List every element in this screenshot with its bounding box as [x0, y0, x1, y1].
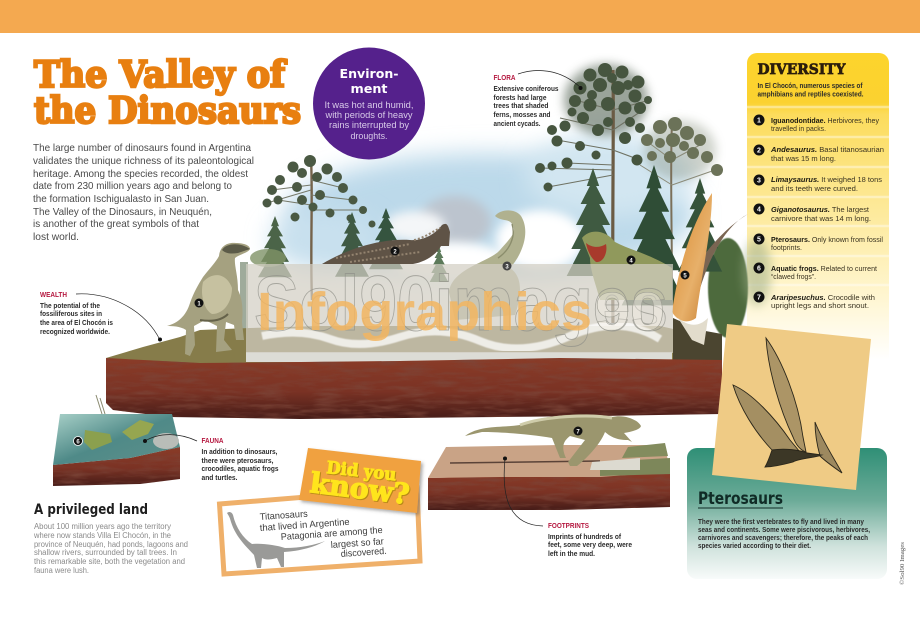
number markers on the scene: 3 — [505, 264, 509, 270]
item 2: that was 15 m long. — [771, 154, 836, 163]
intro text: The large number of dinosaurs found in Argentina — [33, 142, 251, 154]
item 1: travelled in packs. — [771, 124, 826, 133]
callout: flora: FLORA — [494, 75, 516, 82]
intro text: is another of the great symbols of that — [33, 218, 199, 230]
diversity heading: amphibians and reptiles coexisted. — [758, 92, 864, 98]
tree: conifers centre right — [567, 165, 686, 305]
translucent watermark plate: Sol90images — [254, 259, 668, 347]
title: The Valley of — [34, 54, 287, 96]
callout: fauna: In addition to dinosaurs, — [202, 449, 278, 456]
callout: fauna: there were pterosaurs, — [202, 458, 274, 465]
item 3: and its teeth were curved. — [771, 184, 858, 193]
ground: pale strip and dark roots — [246, 318, 722, 363]
item 4: Giganotosaurus. The largest — [771, 205, 870, 214]
callout: footprints: feet, some very deep, were — [548, 542, 632, 549]
title: the Dinosaurs — [34, 90, 301, 132]
soil block main — [106, 358, 722, 419]
box: titanosaur fact — [220, 488, 420, 574]
panel: pterosaurs — [687, 324, 887, 579]
item 4: carnivore that was 14 m long. — [771, 214, 871, 223]
item 1 — [754, 114, 879, 133]
item 6: “clawed frogs”. — [771, 272, 816, 281]
illustration: footprint block with crocodile — [428, 414, 670, 510]
item 7: 7 — [757, 294, 761, 302]
section: a privileged land: fauna were lush. — [34, 566, 89, 575]
sky and clouds — [270, 133, 695, 282]
box: titanosaur fact: Patagonia are among the — [280, 525, 383, 543]
item 3: 3 — [757, 178, 761, 184]
callout: footprints — [503, 456, 632, 558]
intro text — [33, 142, 254, 243]
illustration: pond block with frogs: 6 — [76, 440, 80, 446]
crocodile — [465, 414, 641, 466]
callout: flora: trees that shaded — [494, 103, 548, 110]
item 2 — [754, 144, 884, 163]
intro text: date from 230 million years ago and belong to — [33, 180, 232, 192]
image credit: ©Sol90 Images — [899, 541, 906, 585]
number markers on the scene: 2 — [393, 250, 397, 256]
illustration: footprint block with crocodile: 7 — [576, 430, 580, 436]
badge: did you know: Did you — [326, 459, 398, 486]
callout: wealth — [40, 292, 162, 342]
top orange band — [0, 0, 920, 33]
item 5: Pterosaurs. Only known from fossil — [771, 235, 883, 244]
intro text: The Valley of the Dinosaurs, in Neuquén, — [33, 206, 212, 218]
dinosaur: iguanodon — [167, 243, 250, 356]
callout: flora: Extensive coniferous — [494, 86, 559, 93]
callout: flora: forests had large — [494, 95, 547, 102]
intro text: heritage. Among the species recorded, the oldest — [33, 168, 248, 180]
dinosaur: giganotosaurus — [582, 232, 672, 300]
callout: flora — [494, 71, 582, 128]
panel: pterosaurs: species varied according to their diet. — [698, 543, 811, 550]
callout: flora: ancient cycads. — [494, 121, 541, 128]
item 6: 6 — [757, 266, 761, 272]
box: titanosaur fact: that lived in Argentine — [259, 517, 350, 534]
callout: environment: with periods of heavy — [324, 110, 413, 120]
callout: footprints: left in the mud. — [548, 551, 595, 558]
panel: pterosaurs: carnivores and scavengers; therefore, the peaks of each — [698, 535, 868, 542]
translucent watermark plate: 90 — [595, 282, 665, 342]
box: titanosaur fact: Titanosaurs — [259, 509, 308, 523]
box: titanosaur fact: largest so far — [330, 536, 384, 551]
section: a privileged land: this remarkable site, both the vegetation and — [34, 557, 185, 566]
badge: did you know: know? — [308, 466, 411, 511]
panel: pterosaurs: Pterosaurs — [698, 489, 783, 509]
tree: right background foliage — [678, 178, 771, 338]
callout: flora: ferns, mosses and — [494, 112, 550, 119]
item 7 — [754, 292, 875, 310]
callout: environment: Environ- — [340, 66, 398, 81]
icon: titanosaur sketch — [227, 512, 325, 568]
callout: wealth: the area of El Chocón is — [40, 320, 113, 327]
badge: did you know: know? — [309, 467, 412, 512]
section: a privileged land: About 100 million years ago the territory — [34, 522, 171, 531]
callout: environment: rains interrupted by — [329, 120, 410, 130]
callout: environment: droughts. — [350, 131, 388, 141]
icon: pterosaur drawing — [733, 338, 842, 473]
panel: pterosaurs: seas and continents. Some were piscivorous, herbivores, — [698, 527, 870, 534]
item 4 — [754, 204, 871, 223]
callout: fauna: FAUNA — [202, 438, 224, 445]
callout: environment: It was hot and humid, — [324, 100, 414, 110]
intro text: lost world. — [33, 231, 79, 243]
title — [34, 54, 301, 132]
diversity heading: DIVERSITY — [758, 62, 846, 78]
section: a privileged land: shallow rivers, surrounded by tall trees. In — [34, 548, 177, 557]
section: a privileged land: province of Neuquén, had ponds, lagoons and — [34, 540, 188, 549]
diversity heading: In El Chocón, numerous species of — [758, 83, 863, 90]
item 4: 4 — [757, 206, 761, 214]
item 2: 2 — [757, 148, 761, 154]
diversity list — [754, 114, 884, 310]
callout: wealth: recognized worldwide. — [40, 329, 110, 336]
badge: did you know — [299, 448, 421, 513]
callout: footprints: FOOTPRINTS — [548, 523, 589, 530]
tree: tall araucaria pair — [535, 63, 723, 330]
dinosaur: limaysaurus — [449, 210, 525, 320]
illustration: prehistoric valley scene — [106, 63, 771, 419]
diversity heading — [758, 62, 864, 98]
item 7: Araripesuchus. Crocodile with — [770, 293, 875, 302]
callout: wealth: WEALTH — [40, 292, 67, 299]
number markers on the scene: 4 — [629, 258, 633, 264]
item 3 — [754, 174, 882, 193]
item 5 — [754, 234, 883, 252]
callout: environment: ment — [350, 81, 388, 96]
dinosaur: pterosaur in flight — [672, 193, 748, 345]
item 1: 1 — [757, 118, 761, 124]
intro text: validates the unique richness of its paleontological — [33, 155, 254, 167]
item 2: Andesaurus. Basal titanosaurian — [770, 145, 884, 154]
callout: fauna: and turtles. — [202, 475, 238, 482]
number markers on the scene: 5 — [683, 274, 687, 280]
panel: pterosaurs: They were the first vertebrates to fly and lived in many — [698, 519, 864, 526]
item 5: 5 — [757, 236, 761, 244]
section: a privileged land: where now stands Villa El Chocón, in the — [33, 531, 172, 540]
item 6 — [754, 262, 878, 281]
dinosaur: andesaurus — [322, 224, 450, 264]
box: titanosaur fact: discovered. — [340, 546, 387, 560]
section: a privileged land: A privileged land — [34, 502, 148, 518]
illustration: pond block with frogs — [53, 395, 180, 486]
tree: conifers left — [240, 208, 448, 342]
translucent watermark plate: Infographics — [257, 282, 592, 342]
item 7: upright legs and short snout. — [771, 301, 869, 310]
badge: did you know: Did you — [325, 458, 397, 485]
tree: left araucaria — [262, 155, 376, 300]
card: pterosaur sketch — [712, 324, 871, 490]
number markers on the scene — [194, 246, 690, 308]
callout: fauna — [143, 435, 279, 482]
item 6: Aquatic frogs. Related to current — [771, 264, 878, 273]
ground surface — [106, 326, 722, 364]
callout: environment — [313, 48, 425, 160]
item 5: footprints. — [771, 243, 802, 252]
section: a privileged land — [33, 502, 188, 575]
callout: fauna: crocodiles, aquatic frogs — [202, 466, 279, 473]
callout: wealth: fossiliferous sites in — [40, 311, 102, 318]
callout: wealth: The potential of the — [40, 303, 100, 310]
item 3: Limaysaurus. It weighed 18 tons — [771, 175, 882, 184]
callout: footprints: Imprints of hundreds of — [548, 534, 622, 541]
panel: diversity background — [747, 53, 889, 360]
number markers on the scene: 1 — [197, 302, 201, 308]
intro text: the formation Ischigualasto in San Juan. — [33, 193, 209, 205]
item 1: Iguanodontidae. Herbivores, they — [771, 116, 879, 125]
